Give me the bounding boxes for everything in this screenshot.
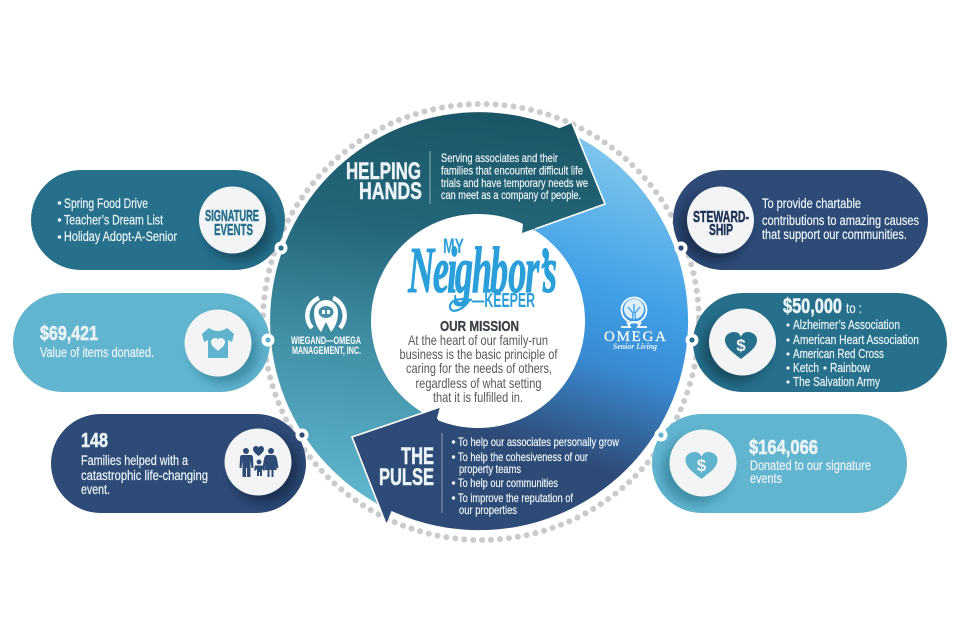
stat: $69,421: $69,421 — [40, 323, 98, 345]
text block: our mission: regardless of what setting — [416, 375, 542, 391]
list: signature events: Holiday Adopt-A-Senior — [64, 229, 177, 244]
list: recipients: The Salvation Army — [793, 374, 880, 389]
text block: the pulse list — [442, 433, 619, 517]
arrow: helping hands — [500, 123, 605, 233]
connector nodes — [262, 242, 698, 442]
text block: helping hands description: families that encounter difficult life — [441, 164, 583, 178]
panel: $164,066 donated — [652, 414, 907, 513]
dotted ring — [263, 104, 699, 540]
list: recipients: American Heart Association — [793, 332, 919, 347]
logo: omega senior living: Senior Living — [613, 341, 658, 351]
logo: wiegand omega: MANAGEMENT, INC. — [292, 345, 361, 357]
text block: the pulse list: our properties — [459, 503, 517, 517]
logo: omega senior living — [604, 298, 666, 351]
icon: family with heart — [240, 446, 278, 477]
text block: helping hands description: can meet as a company of people. — [441, 188, 581, 202]
stat: $69,421: Value of items donated. — [40, 345, 154, 360]
panel: centre white circle — [371, 214, 585, 428]
list: recipients — [786, 317, 919, 389]
title: my neighbor's keeper: —KEEPER — [472, 290, 535, 312]
stat: $50,000: $50,000 — [783, 295, 842, 318]
stat: 148 families: catastrophic life-changing — [81, 468, 208, 483]
stat: 148 families — [81, 430, 208, 497]
heading: the pulse: PULSE — [379, 464, 434, 491]
heading: signature events: EVENTS — [214, 222, 253, 239]
heading: helping hands: HELPING — [346, 158, 421, 185]
text block: helping hands description: trials and have temporary needs we — [441, 176, 588, 190]
text block: our mission: At the heart of our family-run — [408, 332, 548, 348]
text block: helping hands description — [430, 151, 588, 204]
panel: value of items donated — [13, 293, 270, 392]
logo: wiegand omega — [291, 298, 361, 357]
heading: the pulse — [379, 443, 434, 491]
list: recipients: Alzheimer’s Association — [793, 317, 900, 332]
text block: our mission: caring for the needs of others, — [406, 360, 552, 376]
panel: stewardship — [673, 170, 928, 270]
icon: heart with dollar — [725, 332, 757, 359]
text block: stewardship: that support our communities. — [762, 227, 907, 242]
stat: $164,066 — [749, 437, 871, 486]
icon: heart with dollar light: $ — [697, 456, 707, 475]
list: recipients: Ketch — [793, 360, 819, 375]
title: my neighbor's keeper: MY — [443, 235, 464, 258]
text block: our mission: OUR MISSION — [440, 318, 519, 335]
panel: signature events — [31, 170, 285, 270]
text block: the pulse list: property teams — [459, 462, 521, 476]
list: signature events — [58, 196, 177, 244]
stat: $164,066: $164,066 — [749, 437, 818, 459]
heading: stewardship: SHIP — [709, 222, 733, 239]
panel: blue right arc — [376, 133, 688, 530]
text block: stewardship — [762, 196, 919, 242]
panel: teal left arc — [270, 112, 570, 503]
stat: 148 families: 148 — [81, 430, 108, 452]
heading: signature events: SIGNATURE — [205, 208, 259, 225]
heading: signature events — [205, 208, 259, 239]
panel: families helped — [51, 414, 306, 513]
stat: 148 families: event. — [81, 482, 110, 497]
heading: helping hands: HANDS — [359, 178, 422, 205]
heading: stewardship — [693, 209, 749, 239]
text block: our mission: that it is fulfilled in. — [433, 389, 523, 405]
list: signature events: Teacher’s Dream List — [64, 212, 163, 228]
arrow: the pulse — [352, 407, 470, 524]
text block: our mission: business is the basic principle of — [400, 346, 558, 362]
heading: stewardship: STEWARD- — [693, 209, 749, 226]
text block: stewardship: To provide chartable — [762, 196, 861, 211]
text block: helping hands description: Serving associates and their — [441, 151, 558, 165]
panel: $50,000 recipients — [693, 293, 947, 392]
text block: our mission — [400, 318, 558, 405]
stat: $164,066: events — [750, 471, 782, 486]
text block: stewardship: contributions to amazing causes — [762, 213, 919, 228]
text block: the pulse list: To help the cohesiveness of our — [458, 450, 588, 464]
icon: t-shirt with heart — [202, 328, 234, 358]
list: recipients: American Red Cross — [793, 346, 884, 361]
list: recipients: Rainbow — [830, 360, 870, 375]
icon: heart with dollar light — [686, 452, 718, 479]
logo: omega senior living: OMEGA — [604, 329, 666, 345]
stat: $50,000: to : — [846, 300, 862, 316]
text block: the pulse list: To improve the reputation of — [458, 491, 574, 505]
title: my neighbor's keeper: Neighbor’s — [407, 234, 557, 307]
stat: $164,066: Donated to our signature — [750, 458, 871, 473]
stat: 148 families: Families helped with a — [81, 453, 188, 468]
icon: heart with dollar: $ — [736, 336, 746, 355]
heading: the pulse: THE — [401, 443, 434, 470]
stat: $69,421 — [40, 323, 154, 360]
text block: the pulse list: To help our associates personally grow — [458, 435, 619, 449]
list: signature events: Spring Food Drive — [64, 196, 148, 211]
logo: wiegand omega: WIEGAND—OMEGA — [291, 335, 361, 347]
text block: the pulse list: To help our communities — [458, 476, 558, 490]
heading: helping hands — [346, 158, 422, 205]
